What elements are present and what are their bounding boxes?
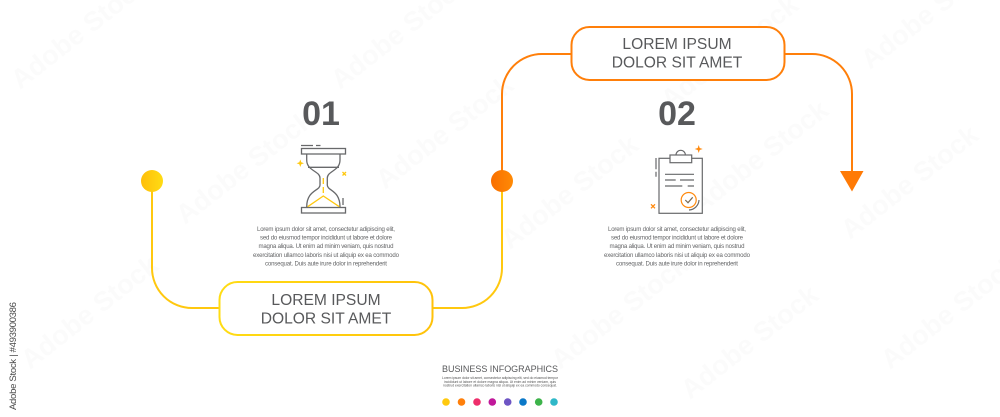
orange connector line with arrow xyxy=(502,54,864,192)
colour dots legend xyxy=(442,398,558,406)
mid dot: orange xyxy=(491,170,513,192)
text block 1: consequat. Duis aute irure dolor in reprehenderit xyxy=(265,260,387,267)
text block 1: magna aliqua. Ut enim ad minim veniam, quis nostrud xyxy=(258,243,394,250)
label box 1: LOREM IPSUM xyxy=(271,292,381,309)
footer text xyxy=(442,376,559,388)
label box 1 xyxy=(220,282,432,335)
text block 1 xyxy=(253,226,400,267)
watermark pattern: Adobe Stock xyxy=(685,94,835,220)
label box 2: DOLOR SIT AMET xyxy=(612,54,743,72)
watermark pattern: Adobe Stock xyxy=(835,119,985,245)
watermark pattern: Adobe Stock xyxy=(545,249,695,375)
footer title: BUSINESS INFOGRAPHICS xyxy=(442,364,558,374)
footer text: Lorem ipsum dolor sit amet, consectetur adipiscing elit, sed do eiusmod tempor xyxy=(442,376,559,380)
watermark pattern: Adobe Stock xyxy=(15,249,165,375)
text block 1: sed do eiusmod tempor incididunt ut labore et dolore xyxy=(260,235,393,242)
watermark pattern: Adobe Stock xyxy=(170,104,320,230)
icon: clipboard xyxy=(651,145,703,213)
text block 2: Lorem ipsum dolor sit amet, consectetur adipiscing elit, xyxy=(608,226,746,233)
yellow connector line xyxy=(152,181,502,308)
watermark pattern: Adobe Stock xyxy=(370,69,520,195)
label box 1: DOLOR SIT AMET xyxy=(261,310,392,328)
text block 2: sed do eiusmod tempor incididunt ut labore et dolore xyxy=(611,235,744,242)
icon: hourglass xyxy=(297,146,346,213)
label box 2: LOREM IPSUM xyxy=(622,36,732,53)
watermark pattern: Adobe Stock xyxy=(495,129,645,255)
number 01: 01 xyxy=(302,95,340,133)
number 02: 02 xyxy=(658,95,696,133)
text block 2: magna aliqua. Ut enim ad minim veniam, quis nostrud xyxy=(610,243,744,250)
arrowhead xyxy=(840,171,864,192)
text block 1: exercitation ullamco laboris nisi ut aliquip ex ea commodo xyxy=(253,252,400,259)
start dot: yellow xyxy=(141,170,163,192)
footer text: nostrud exercitation ullamco laboris nisi ut aliquip ex ea commodo consequat. xyxy=(443,384,557,388)
text block 2: consequat. Duis aute irure dolor in reprehenderit xyxy=(616,260,738,267)
text block 2: exercitation ullamco laboris nisi ut aliquip ex ea commodo xyxy=(604,252,751,259)
stock id caption: Adobe Stock | #493900386 xyxy=(8,302,19,410)
text block 1: Lorem ipsum dolor sit amet, consectetur adipiscing elit, xyxy=(257,226,395,233)
text block 2 xyxy=(604,226,751,267)
label box 2 xyxy=(572,27,784,80)
watermark pattern: Adobe Stock xyxy=(675,279,825,405)
footer text: incididunt ut labore et dolore magna aliqua. Ut enim ad minim veniam, quis xyxy=(444,380,556,384)
